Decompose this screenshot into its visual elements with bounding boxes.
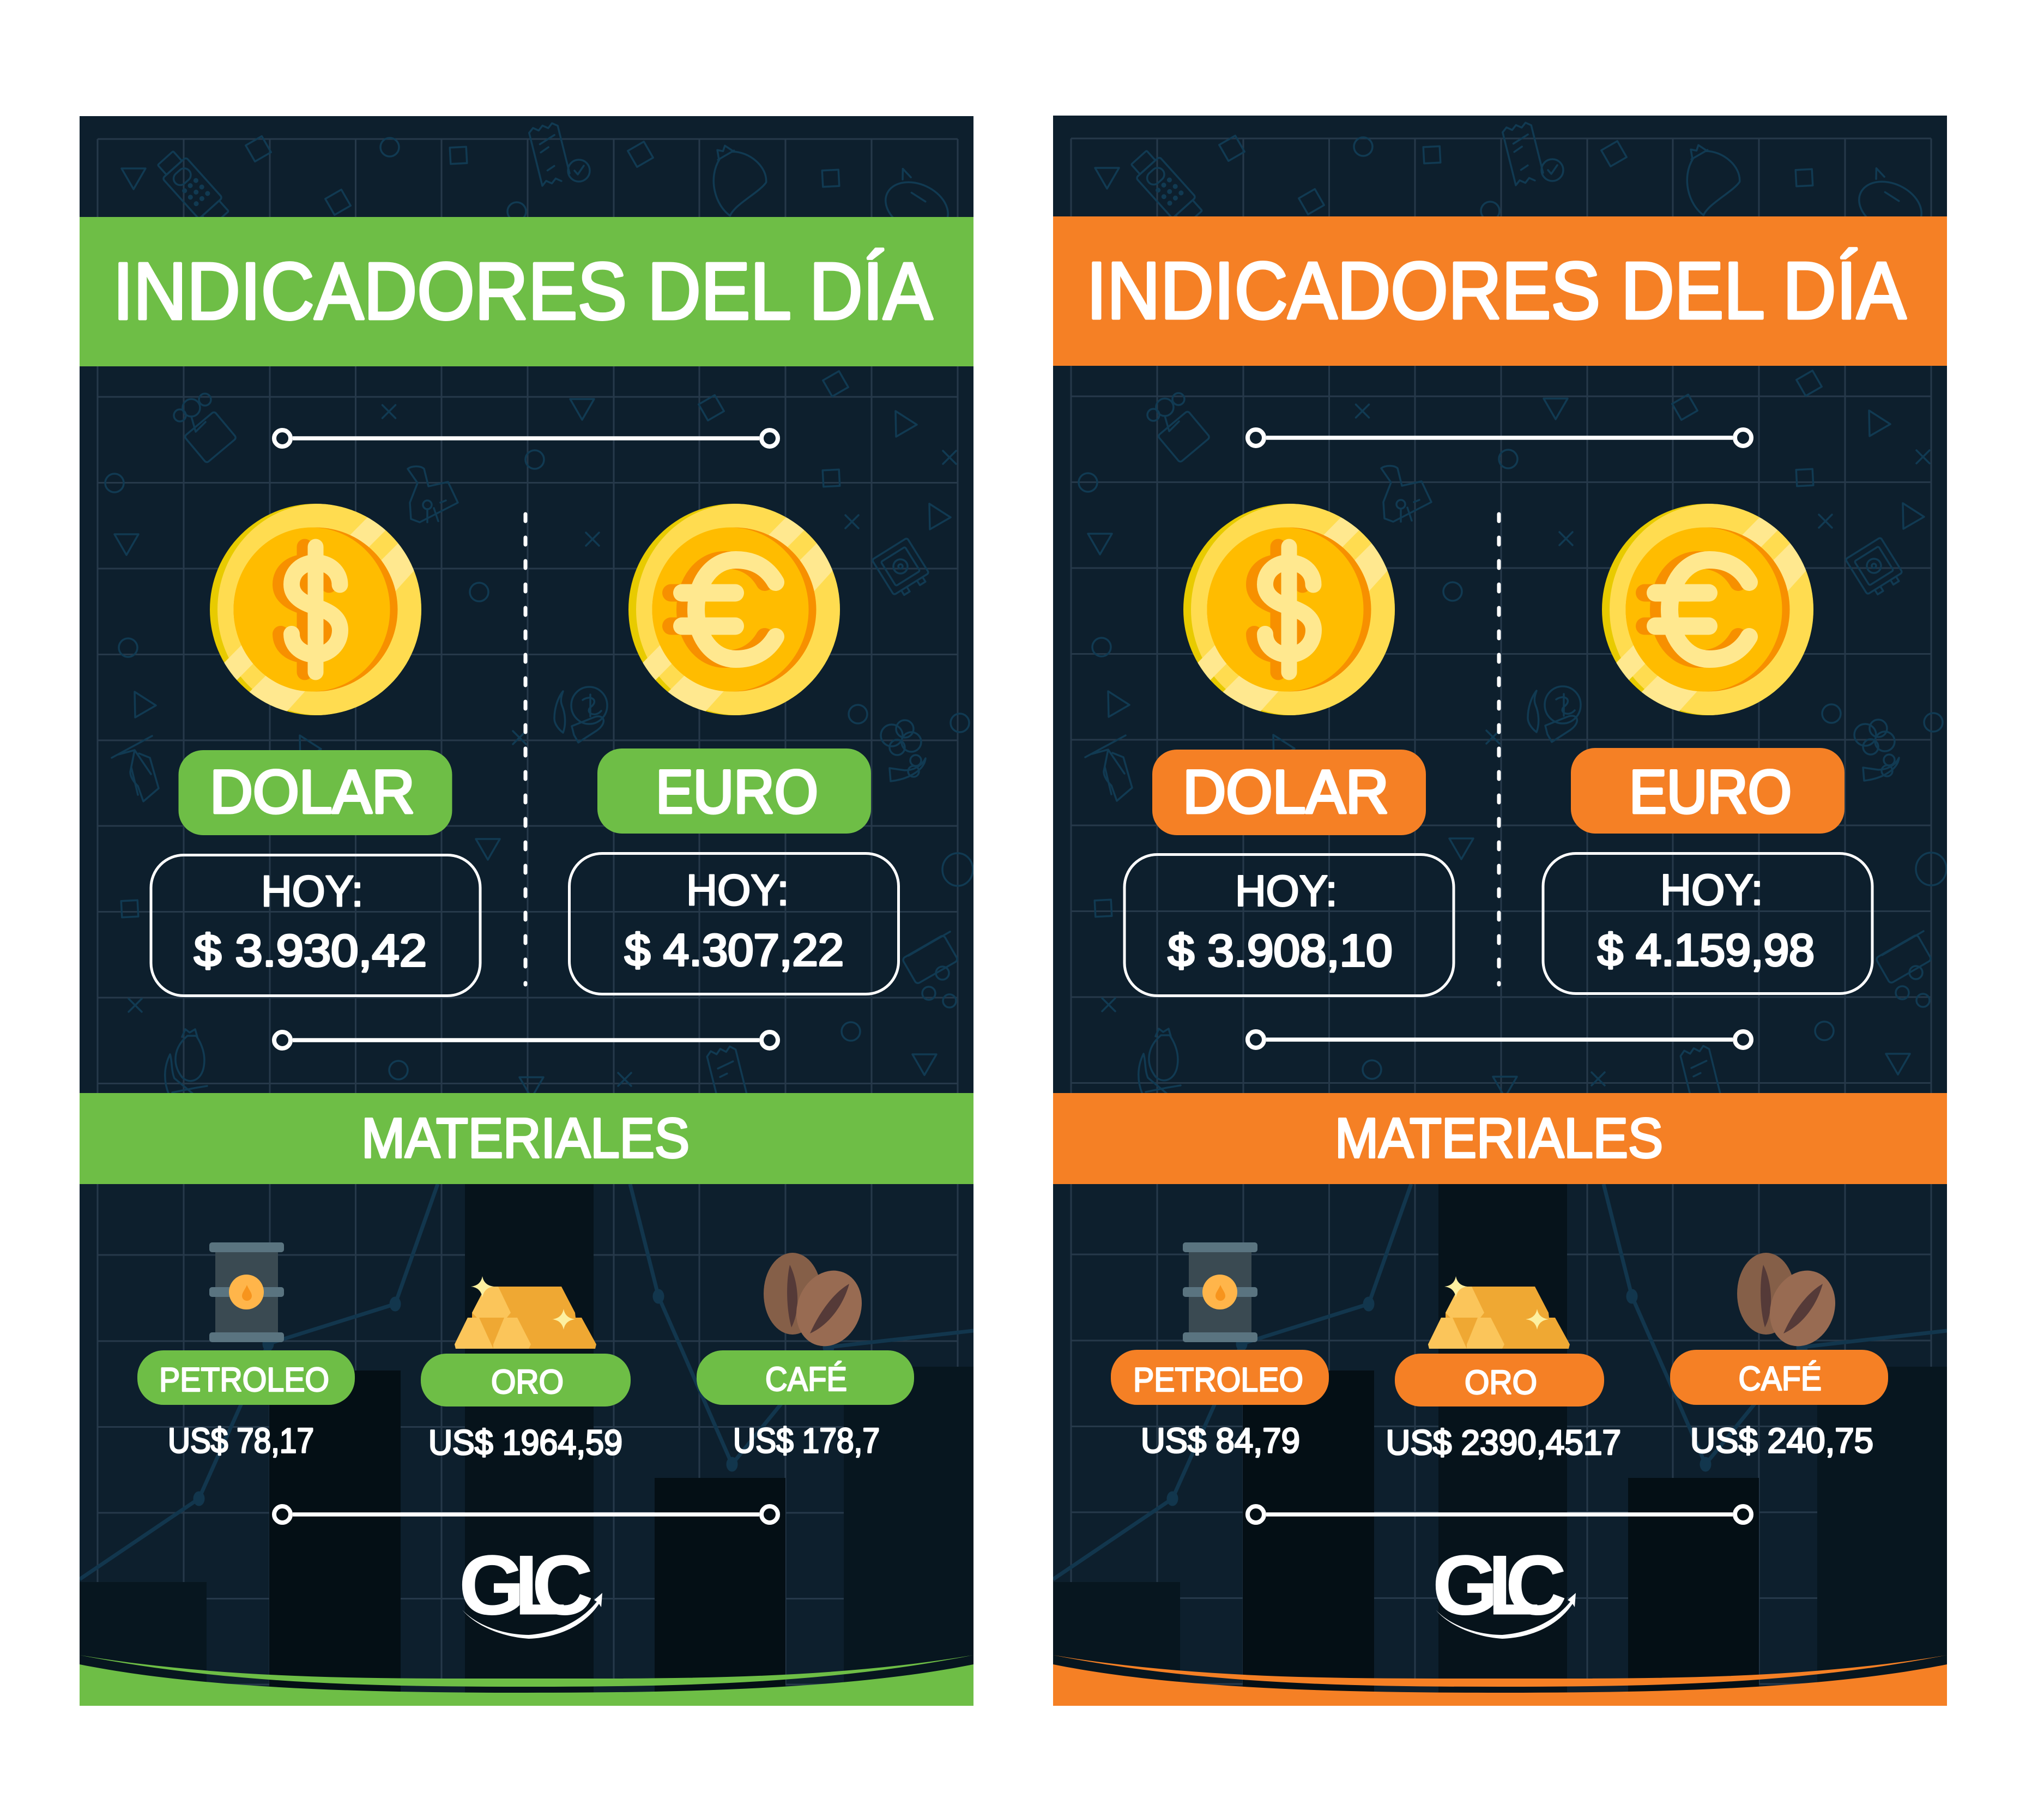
cafe pill bbox=[1670, 1350, 1888, 1405]
logo: GLC: GLC bbox=[1432, 1538, 1567, 1632]
petroleo pill: PETROLEO bbox=[1133, 1361, 1303, 1399]
panel background bbox=[1053, 116, 1947, 1706]
materials heading: MATERIALES bbox=[361, 1107, 690, 1169]
cafe value: US$ 240,75 bbox=[1690, 1421, 1873, 1460]
icon: dollar coin bbox=[1183, 504, 1395, 715]
connector line bottom bbox=[1248, 1506, 1751, 1523]
connector line middle bbox=[1248, 1031, 1751, 1048]
oro pill: ORO bbox=[1465, 1364, 1537, 1402]
bottom orange swoosh bbox=[1053, 1655, 1947, 1706]
oro pill bbox=[421, 1354, 631, 1406]
euro value box: $ 4.307,22 bbox=[625, 925, 844, 975]
icon: euro coin bbox=[1602, 504, 1813, 715]
connector line middle bbox=[274, 1032, 778, 1048]
title band bbox=[1053, 216, 1947, 366]
dolar label pill bbox=[179, 750, 452, 835]
oro pill: ORO bbox=[491, 1363, 564, 1401]
euro label pill bbox=[1571, 748, 1845, 834]
title: INDICADORES DEL DÍA bbox=[113, 246, 933, 336]
euro value box: HOY: bbox=[1660, 866, 1763, 914]
dolar value box bbox=[1124, 855, 1454, 995]
dolar value box: $ 3.908,10 bbox=[1168, 925, 1393, 976]
petroleo pill bbox=[137, 1350, 355, 1405]
connector line bottom bbox=[274, 1506, 778, 1523]
dolar value box: HOY: bbox=[261, 867, 363, 915]
materials band bbox=[1053, 1093, 1947, 1184]
dashed divider bbox=[523, 514, 528, 985]
icon: euro coin bbox=[628, 504, 840, 715]
euro value box bbox=[1543, 854, 1872, 993]
icon: gold bars bbox=[1428, 1276, 1570, 1349]
petroleo value: US$ 78,17 bbox=[168, 1421, 314, 1460]
background grid and finance icons bbox=[1053, 122, 1947, 1699]
dolar label pill: DOLAR bbox=[1183, 758, 1389, 826]
logo: GLC: GLC bbox=[459, 1538, 593, 1632]
cafe pill bbox=[697, 1350, 914, 1405]
title band bbox=[80, 217, 973, 366]
dashed divider bbox=[1497, 514, 1501, 985]
euro label pill: EURO bbox=[656, 758, 818, 826]
petroleo pill: PETROLEO bbox=[159, 1361, 329, 1399]
connector line top bbox=[274, 430, 778, 446]
euro value box: HOY: bbox=[686, 866, 789, 914]
materials heading: MATERIALES bbox=[1335, 1107, 1663, 1169]
panel: right orange indicators bbox=[1053, 116, 1947, 1706]
icon: coffee beans bbox=[764, 1253, 873, 1356]
icon: dollar coin bbox=[210, 504, 421, 715]
cafe pill: CAFÉ bbox=[765, 1361, 847, 1398]
dolar label pill bbox=[1152, 750, 1426, 835]
icon: coffee beans bbox=[1737, 1253, 1846, 1356]
panel: left green indicators bbox=[80, 116, 973, 1706]
oro value: US$ 1964,59 bbox=[428, 1423, 622, 1462]
panel background bbox=[80, 116, 973, 1706]
petroleo pill bbox=[1111, 1350, 1329, 1405]
dolar label pill: DOLAR bbox=[210, 758, 415, 826]
materials band bbox=[80, 1093, 973, 1184]
oro value: US$ 2390,4517 bbox=[1386, 1423, 1621, 1462]
connector line top bbox=[1248, 430, 1751, 446]
dolar value box: $ 3.930,42 bbox=[194, 925, 427, 976]
title: INDICADORES DEL DÍA bbox=[1086, 246, 1906, 336]
oro pill bbox=[1395, 1354, 1604, 1406]
euro value box bbox=[569, 854, 898, 994]
dolar value box: HOY: bbox=[1235, 867, 1338, 915]
cafe pill: CAFÉ bbox=[1739, 1360, 1822, 1398]
icon: oil barrel bbox=[1183, 1242, 1257, 1342]
euro label pill: EURO bbox=[1629, 758, 1792, 826]
icon: oil barrel bbox=[209, 1242, 284, 1342]
background grid and finance icons bbox=[80, 122, 973, 1699]
cafe value: US$ 178,7 bbox=[733, 1421, 880, 1460]
icon: gold bars bbox=[455, 1276, 596, 1349]
euro label pill bbox=[597, 748, 871, 834]
dolar value box bbox=[151, 855, 480, 995]
bottom green swoosh bbox=[80, 1655, 973, 1706]
euro value box: $ 4.159,98 bbox=[1598, 925, 1815, 975]
petroleo value: US$ 84,79 bbox=[1141, 1421, 1300, 1460]
